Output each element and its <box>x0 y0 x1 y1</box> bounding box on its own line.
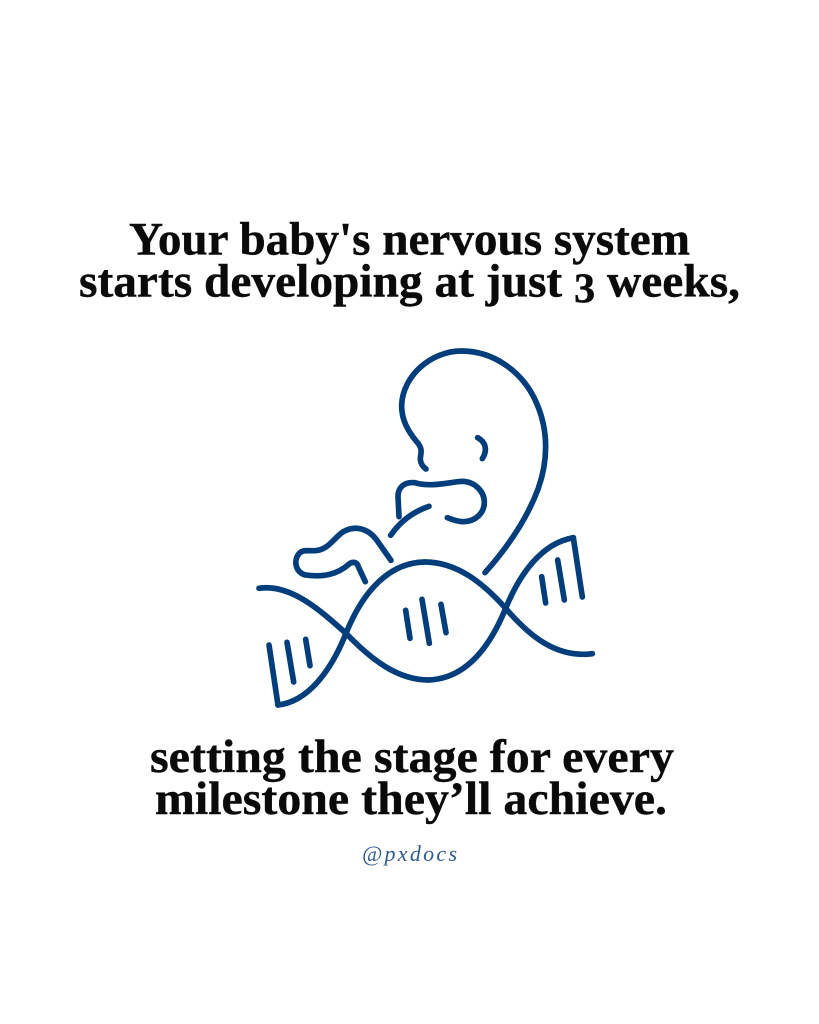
heading: top: weeks, <box>595 256 740 308</box>
heading: top: 3 <box>574 266 595 312</box>
dna: strand two <box>259 538 573 680</box>
dna: middle rungs <box>406 599 446 643</box>
embryo: head and back <box>402 351 546 573</box>
embryo: leg <box>296 528 391 582</box>
heading: top <box>79 214 740 312</box>
dna: left rungs <box>287 639 310 682</box>
dna: strand one <box>278 562 592 705</box>
embryo: eye <box>478 438 485 459</box>
heading: bottom: milestone they’ll achieve. <box>155 773 667 825</box>
icon: embryo over DNA helix <box>259 351 592 705</box>
heading: top: starts developing at just <box>79 256 558 308</box>
heading: top: Your baby's nervous system <box>129 214 690 266</box>
handle: @pxdocs <box>362 841 457 866</box>
dna: left end <box>269 645 278 705</box>
embryo: arm crease <box>391 506 429 535</box>
heading: bottom: setting the stage for every <box>150 731 675 783</box>
heading: bottom <box>150 731 675 825</box>
embryo: arm <box>398 481 484 522</box>
dna: right rungs <box>542 560 564 603</box>
dna: right end <box>573 538 582 597</box>
